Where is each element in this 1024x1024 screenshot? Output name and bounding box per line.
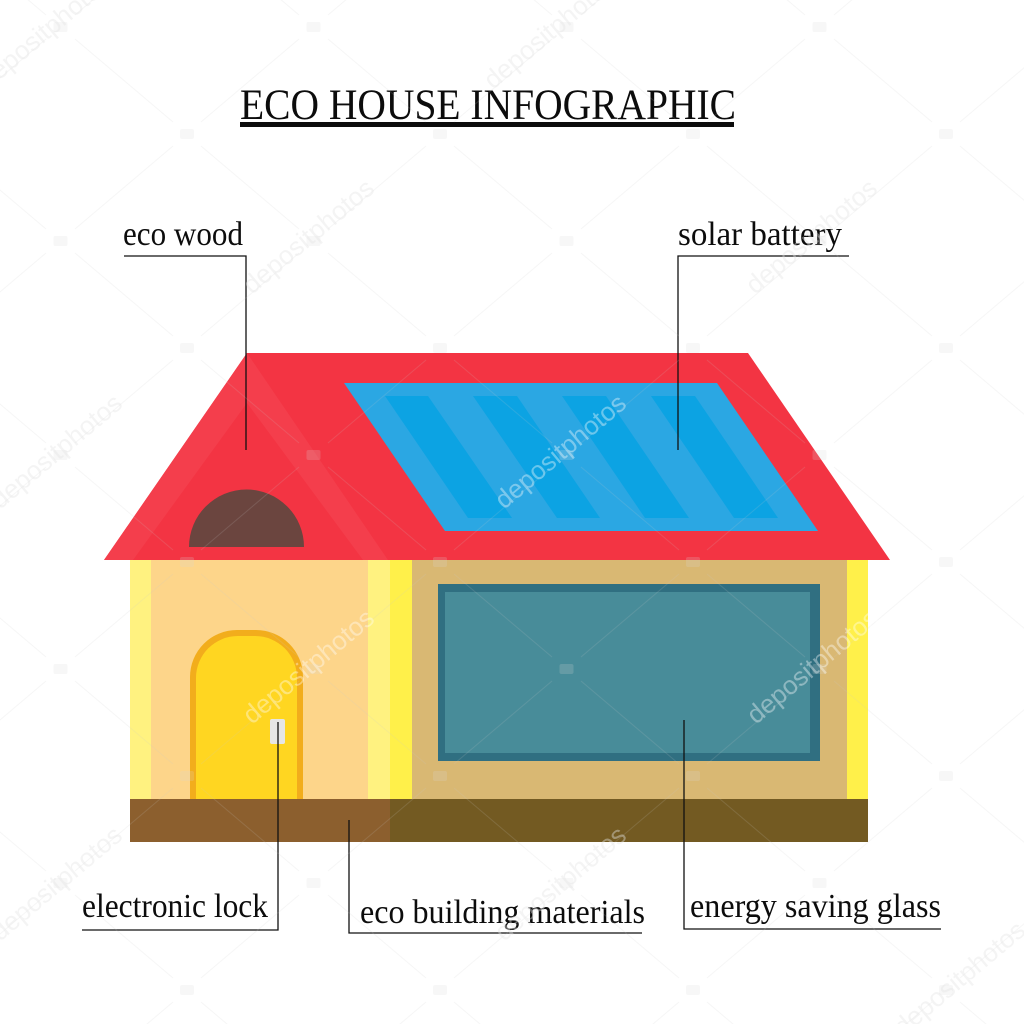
energy saving window	[438, 584, 820, 761]
stock watermark: depositphotos	[489, 388, 632, 515]
stock watermark: depositphotos	[489, 820, 632, 947]
stock watermark: depositphotos	[740, 173, 883, 300]
label: electronic lock: electronic lock	[82, 888, 268, 925]
stock watermark: depositphotos	[237, 173, 380, 300]
label: energy saving glass: energy saving glass	[690, 888, 941, 925]
label: solar battery: solar battery	[678, 216, 842, 253]
label: eco building materials	[349, 820, 645, 933]
label: eco building materials: eco building materials	[360, 894, 645, 931]
label: energy saving glass	[684, 720, 941, 929]
attic window	[189, 490, 304, 547]
stock watermark: depositphotos	[741, 603, 884, 730]
solar battery panel	[344, 383, 818, 531]
roof	[104, 353, 890, 560]
label: solar battery	[678, 216, 849, 450]
label: electronic lock	[82, 722, 278, 930]
label: eco wood: eco wood	[123, 216, 243, 253]
label: eco wood	[123, 216, 246, 450]
house illustration	[104, 353, 890, 842]
stock watermark: depositphotos	[237, 603, 380, 730]
foundation	[130, 799, 868, 842]
wall: right section	[390, 558, 868, 800]
door	[190, 630, 303, 799]
title: ECO HOUSE INFOGRAPHIC	[240, 82, 736, 129]
electronic lock icon	[270, 719, 285, 744]
wall: left section	[130, 558, 390, 800]
